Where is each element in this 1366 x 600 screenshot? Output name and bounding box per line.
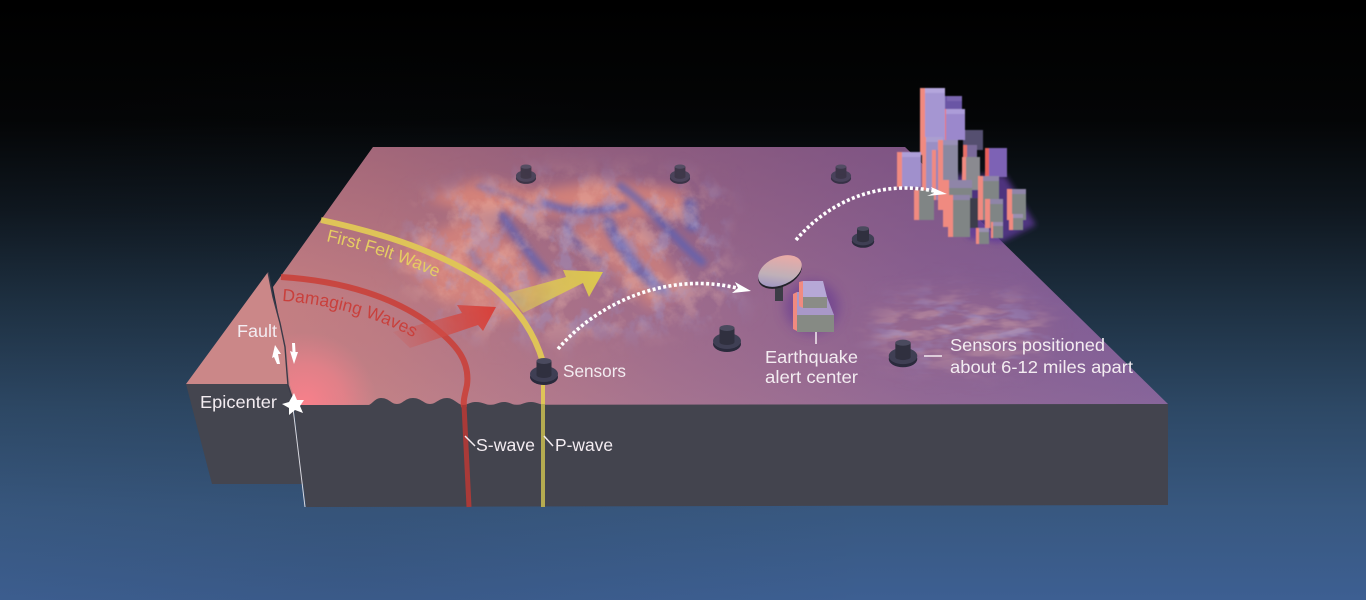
panel: terrain surface (186, 147, 1168, 405)
fault line (268, 272, 292, 397)
city ground shadow (950, 175, 1036, 243)
icon: back sensor left (516, 164, 536, 184)
icon: sensor at right (889, 340, 917, 367)
city skyline (897, 88, 1036, 244)
label: sensors positioned: Sensors positioned (950, 335, 1105, 355)
label: fault: Fault (237, 321, 277, 341)
panel: block front faces (186, 384, 1168, 507)
label: earthquake alert center: alert center (765, 367, 858, 387)
fault plane line (293, 408, 305, 507)
arrow: red damaging waves direction (393, 305, 496, 348)
icon: epicenter star (282, 393, 304, 415)
mountains: central range (390, 166, 744, 348)
dotted arrow: alert center to city (796, 187, 947, 240)
P-wave front: first felt wave (321, 220, 543, 507)
arrow: yellow wave direction (508, 270, 603, 313)
icon: fault motion arrows (272, 343, 298, 364)
icon: back sensor middle (670, 164, 690, 184)
icon: sensor near alert center (713, 325, 741, 352)
label: earthquake alert center: Earthquake (765, 347, 858, 367)
curved label: damaging waves: Damaging Waves (284, 289, 416, 336)
icon: sensor on wave (530, 358, 558, 385)
curved label: first felt wave: First Felt Wave (327, 230, 439, 276)
icon: back sensor right (831, 164, 851, 184)
label: earthquake alert center (765, 332, 858, 387)
label: epicenter: Epicenter (200, 392, 277, 412)
icon: earthquake alert center building (785, 281, 839, 333)
icon: satellite dish (753, 249, 807, 301)
label: P-wave: P-wave (555, 435, 613, 455)
mountains: right foothills (870, 287, 1054, 372)
icon: mid sensor (852, 226, 874, 248)
wavy front edge (365, 398, 545, 408)
label: sensors: Sensors (563, 361, 626, 381)
label: S-wave: S-wave (476, 435, 535, 455)
S-wave front: damaging waves (281, 277, 469, 507)
epicenter glow (285, 331, 380, 405)
label: sensors positioned: about 6-12 miles apart (950, 357, 1133, 377)
dotted arrow: sensors to alert center (558, 282, 751, 349)
label: sensors positioned (924, 335, 1133, 377)
